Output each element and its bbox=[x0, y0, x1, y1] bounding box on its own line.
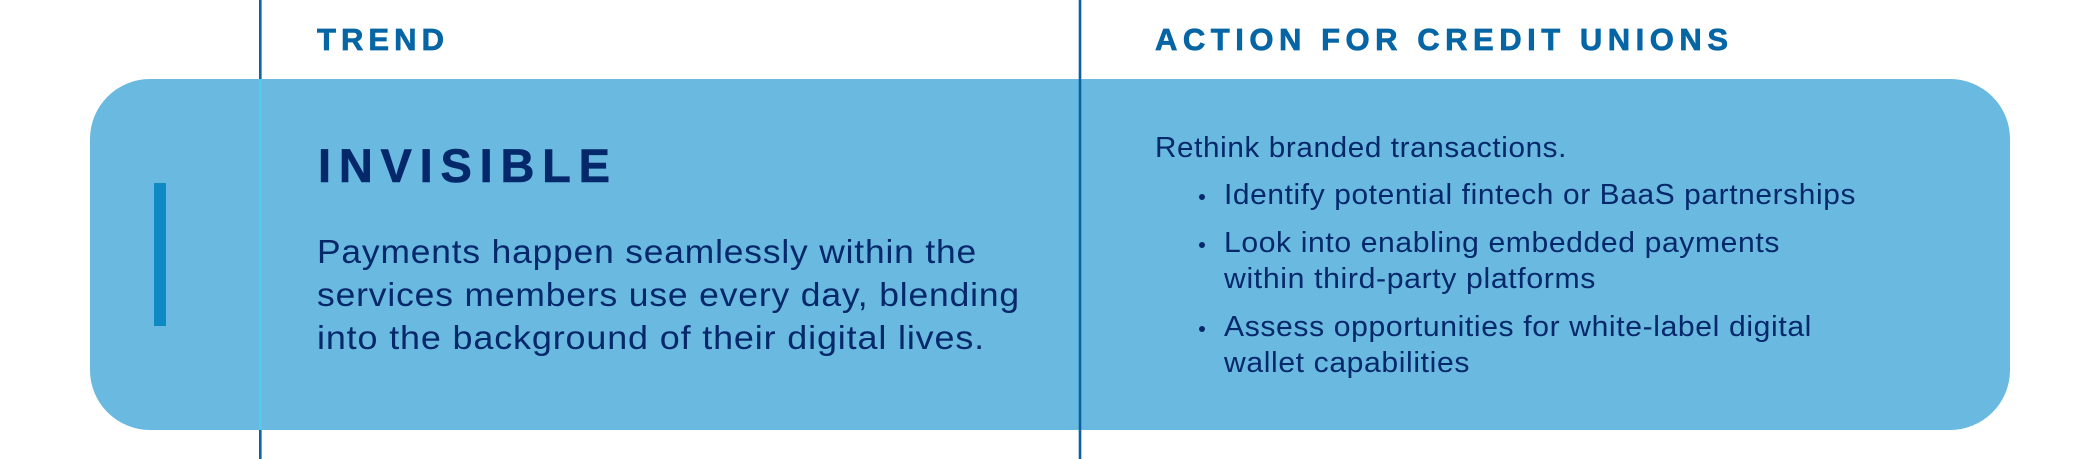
action intro: Rethink branded transactions. bbox=[1155, 132, 1567, 164]
bullet item: partnerships: Identify potential fintech or BaaS partnerships bbox=[1224, 179, 1856, 211]
column heading: trend: TREND bbox=[317, 22, 444, 57]
divider: trend column, below the card bbox=[259, 430, 262, 459]
bullet item: embedded payments bbox=[1199, 227, 1780, 295]
trend description: Payments happen seamlessly within the bbox=[317, 234, 977, 271]
bullet item: digital wallet: Assess opportunities for white-label digital bbox=[1224, 311, 1812, 343]
bullet item: digital wallet bbox=[1199, 311, 1812, 379]
divider: action column bbox=[1079, 0, 1081, 459]
column heading: action for credit unions: ACTION FOR CREDIT UNIONS bbox=[1155, 22, 1728, 57]
trend description bbox=[317, 234, 1020, 357]
accent bar bbox=[154, 183, 166, 326]
trend name: INVISIBLE bbox=[318, 139, 610, 192]
trend description: services members use every day, blending bbox=[317, 277, 1020, 314]
trend description: into the background of their digital lives. bbox=[317, 320, 985, 357]
divider: trend column, inside the card bbox=[259, 79, 262, 430]
bullet item: digital wallet: wallet capabilities bbox=[1223, 347, 1470, 379]
divider: trend column, above the card bbox=[259, 0, 262, 79]
panel: background card bbox=[90, 79, 2010, 430]
action list bbox=[1199, 179, 1856, 379]
bullet item: embedded payments: Look into enabling embedded payments bbox=[1224, 227, 1780, 259]
bullet item: embedded payments: within third-party platforms bbox=[1223, 263, 1596, 295]
